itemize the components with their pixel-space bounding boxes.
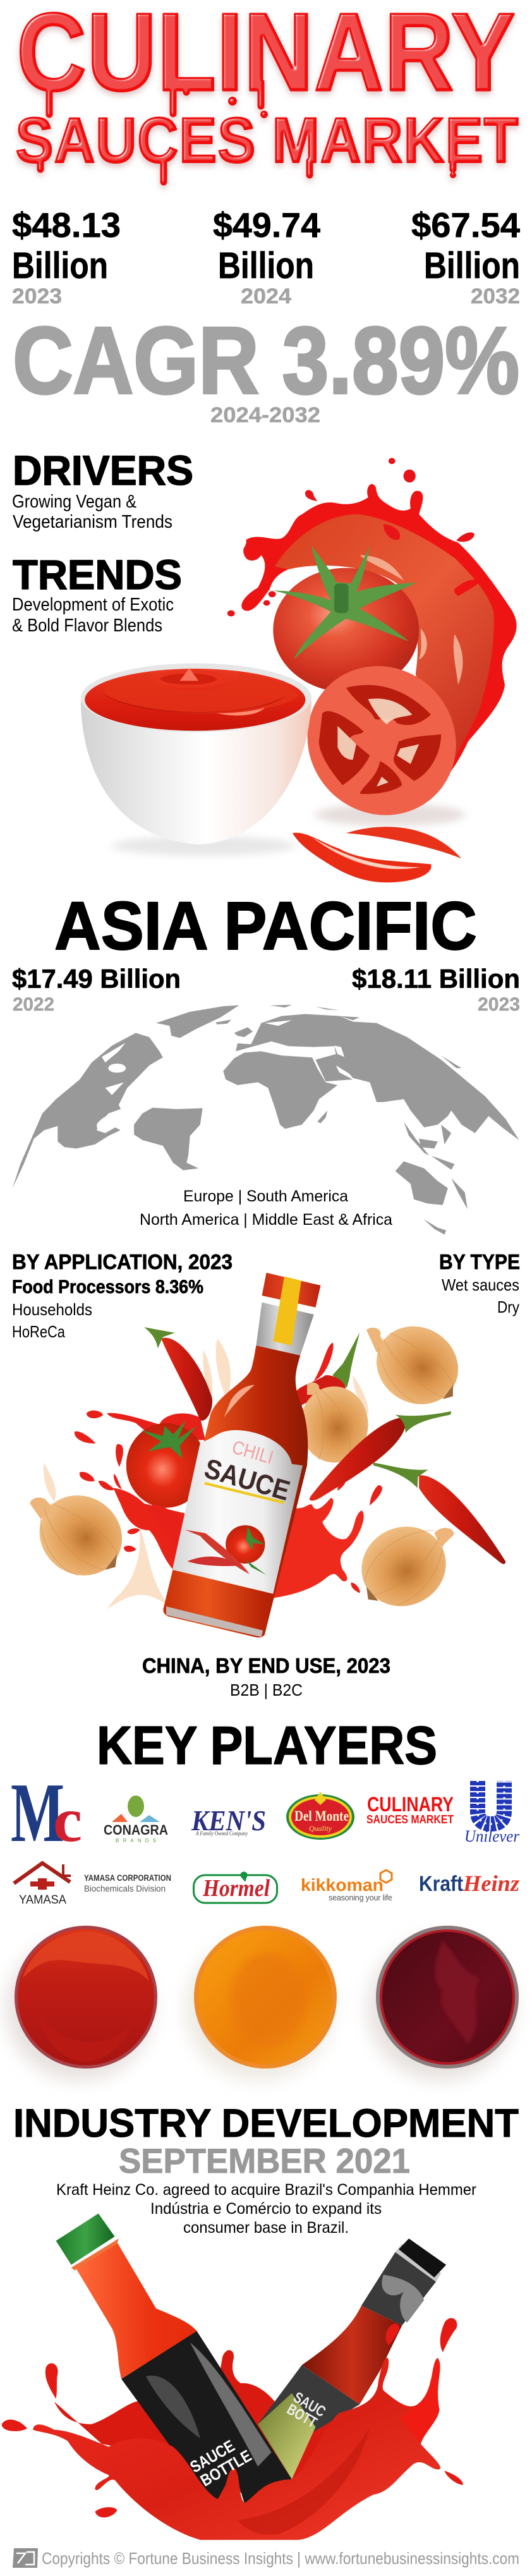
logo: Conagra: CONAGRA xyxy=(104,1822,168,1838)
title: culinary sauces market xyxy=(15,0,519,182)
bottle left xyxy=(56,2213,292,2503)
other regions text xyxy=(140,1188,392,1229)
stat 2023 xyxy=(12,205,121,308)
regional value 2023 xyxy=(352,964,520,1015)
illustration: sauce bottles in splash xyxy=(2,2213,463,2540)
development date and description: Indústria e Comércio to expand its xyxy=(150,2200,382,2218)
bottle label text right: BOTT xyxy=(284,2401,320,2431)
logo: Del Monte xyxy=(286,1792,354,1840)
tomato leaves xyxy=(273,545,416,660)
onion upper right xyxy=(365,1318,470,1413)
drivers text: DRIVERS xyxy=(13,447,193,494)
whole tomato xyxy=(273,568,419,692)
red sauce dish xyxy=(6,1926,157,2081)
chili top left xyxy=(144,1327,212,1421)
logo: Yamasa xyxy=(14,1863,171,1907)
other regions text: Europe | South America xyxy=(183,1188,348,1205)
bottle label xyxy=(172,1430,303,1594)
logo: Kraft Heinz xyxy=(419,1871,519,1896)
chili behind bottle xyxy=(295,1333,360,1406)
development date and description: Kraft Heinz Co. agreed to acquire Brazil's Companhia Hemmer xyxy=(56,2181,476,2199)
logo: Unilever: Unilever xyxy=(464,1827,520,1845)
drivers text: Growing Vegan & xyxy=(12,492,136,512)
by application list: BY APPLICATION, 2023 xyxy=(12,1250,233,1273)
logo: Kikkoman: kikkoman xyxy=(301,1875,384,1895)
stat 2024: $49.74 xyxy=(213,205,320,245)
trends text xyxy=(12,551,182,636)
bottle label text xyxy=(201,1437,293,1507)
cut tomato xyxy=(296,658,468,823)
heading: asia pacific: ASIA PACIFIC xyxy=(54,887,477,964)
stat 2024: 2024 xyxy=(241,284,291,308)
logo: Yamasa: Biochemicals Division xyxy=(84,1883,166,1893)
chili far right xyxy=(373,1462,505,1564)
front splash xyxy=(33,2358,440,2540)
bottle label text left xyxy=(187,2436,255,2490)
stat 2023: $48.13 xyxy=(12,205,121,245)
other regions text: North America | Middle East & Africa xyxy=(140,1211,392,1229)
tomato xyxy=(126,1420,206,1508)
logo: Yamasa: YAMASA xyxy=(19,1893,66,1907)
logo: McCormick: M xyxy=(11,1766,64,1859)
development date and description: consumer base in Brazil. xyxy=(183,2219,349,2237)
logo: Conagra xyxy=(104,1795,168,1844)
stat 2032: 2032 xyxy=(471,284,520,308)
by type list xyxy=(439,1250,520,1316)
dark sauce dish xyxy=(368,1926,519,2081)
bottle label text left: BOTTLE xyxy=(197,2446,255,2490)
splash droplets xyxy=(2,2318,463,2517)
logo: Del Monte: Del Monte xyxy=(294,1808,349,1824)
logo: McCormick: c xyxy=(53,1785,82,1855)
stat 2023: Billion xyxy=(12,245,108,286)
by type list: BY TYPE xyxy=(439,1250,520,1273)
logo: Culinary Sauces Market: SAUCES MARKET xyxy=(366,1813,454,1826)
onion lower right xyxy=(351,1519,456,1613)
splash right xyxy=(273,1498,364,1598)
onion behind bottle xyxy=(300,1382,368,1462)
china end use: CHINA, BY END USE, 2023 xyxy=(142,1654,390,1677)
label tomato and chili xyxy=(185,1525,267,1575)
orange sauce dish xyxy=(186,1926,337,2081)
regional value 2023: 2023 xyxy=(478,994,520,1015)
back splash xyxy=(54,2350,440,2494)
logo: Unilever xyxy=(464,1781,520,1845)
regional value 2023: $18.11 Billion xyxy=(352,964,520,993)
logo: Kraft Heinz: Heinz xyxy=(462,1871,519,1896)
flame wisps xyxy=(44,1339,368,1609)
logo: Culinary Sauces Market: CULINARY xyxy=(367,1793,454,1816)
heading: key players: KEY PLAYERS xyxy=(97,1716,437,1776)
trends text: Development of Exotic xyxy=(12,595,174,615)
market size figures xyxy=(12,205,520,308)
world map xyxy=(13,1005,519,1235)
logo: Del Monte: Quality xyxy=(309,1824,332,1833)
logo: Kikkoman: seasoning your life xyxy=(329,1893,392,1902)
logo: Hormel: Hormel xyxy=(202,1875,270,1902)
sauce bowl xyxy=(81,700,311,844)
onion left xyxy=(30,1488,132,1583)
bottle label text left: SAUCE xyxy=(187,2436,238,2477)
logo: Ken's: A Family Owned Company xyxy=(195,1830,248,1837)
bottle right xyxy=(258,2239,446,2479)
stat 2023: 2023 xyxy=(12,284,62,308)
logo: Ken's: KEN'S xyxy=(191,1804,266,1837)
by application list: Households xyxy=(12,1300,92,1319)
logo: Kikkoman xyxy=(301,1870,392,1902)
regional value 2022: $17.49 Billion xyxy=(12,964,181,993)
stat 2024 xyxy=(213,205,320,308)
bottle label text: SAUCE xyxy=(201,1453,293,1507)
splash left xyxy=(107,1413,205,1440)
stat 2032: $67.54 xyxy=(411,205,520,245)
bottle label text right xyxy=(284,2389,329,2431)
by type list: Wet sauces xyxy=(442,1275,519,1294)
chili right xyxy=(310,1411,451,1501)
drivers text: Vegetarianism Trends xyxy=(13,512,172,532)
regional value 2022 xyxy=(12,964,181,1015)
sauce smears xyxy=(346,827,461,858)
illustration: chili sauce bottle xyxy=(30,1273,505,1637)
trends text: TRENDS xyxy=(13,551,182,598)
by application list: HoReCa xyxy=(12,1322,65,1341)
development date and description xyxy=(56,2141,476,2237)
logo: Kraft Heinz: Kraft xyxy=(419,1872,463,1896)
CAGR heading: 2024-2032 xyxy=(210,403,320,427)
photo: three sauce dishes xyxy=(6,1926,519,2081)
bottle label text: CHILI xyxy=(230,1437,275,1468)
trends text: & Bold Flavor Blends xyxy=(12,616,162,636)
by application list xyxy=(12,1250,233,1341)
by application list: Food Processors 8.36% xyxy=(12,1277,203,1297)
bottle xyxy=(163,1273,320,1637)
china end use xyxy=(142,1654,390,1699)
footer logo xyxy=(13,2548,38,2568)
logo: Yamasa: YAMASA CORPORATION xyxy=(84,1873,171,1883)
regional value 2022: 2022 xyxy=(13,994,54,1015)
stat 2032 xyxy=(411,205,520,308)
heading: industry development: INDUSTRY DEVELOPMENT xyxy=(13,2101,519,2146)
bottle label text right: SAUC xyxy=(291,2389,329,2421)
drivers text xyxy=(12,447,193,532)
by type list: Dry xyxy=(497,1297,519,1316)
development date and description: SEPTEMBER 2021 xyxy=(119,2141,410,2180)
logo: Conagra: BRANDS xyxy=(116,1838,156,1844)
logo: Culinary Sauces Market xyxy=(366,1793,454,1826)
stat 2024: Billion xyxy=(218,245,314,286)
china end use: B2B | B2C xyxy=(230,1680,303,1699)
illustration: tomato sauce bowl and splash xyxy=(81,458,517,882)
